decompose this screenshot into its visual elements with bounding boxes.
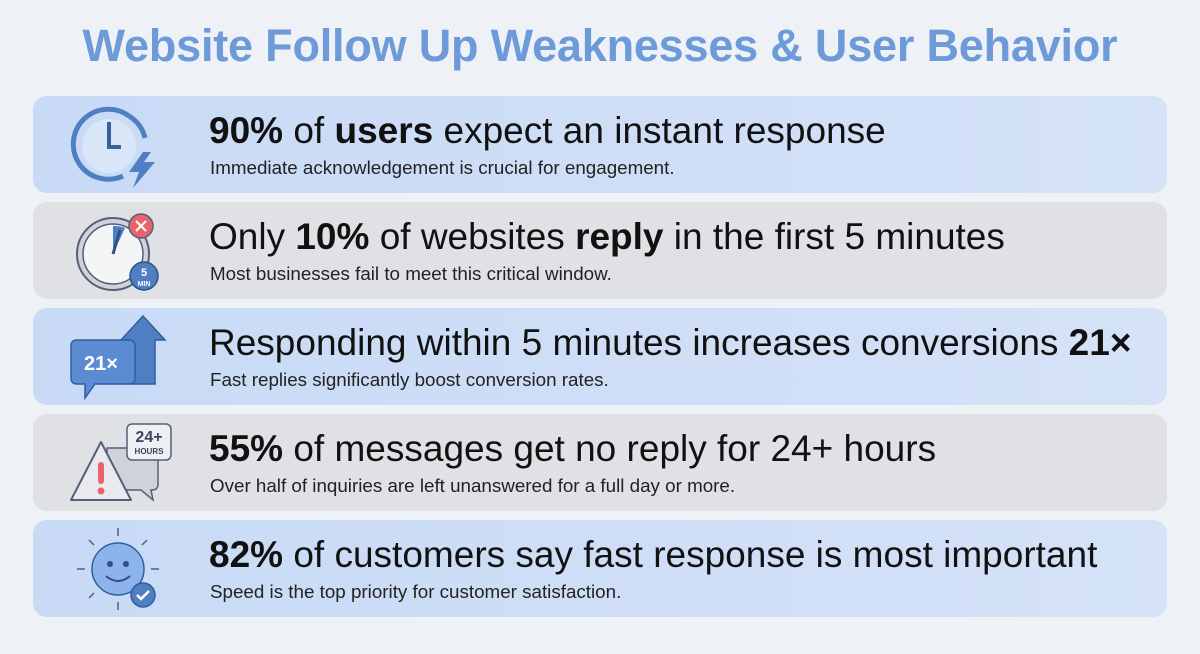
icon: warning triangle with 24+ hours bubble: [70, 423, 172, 502]
heading: 55% of messages get no reply for 24+ hours: [209, 428, 936, 469]
panel: only 10% reply: [33, 202, 1167, 299]
icon: 21x chat with up arrow: [70, 315, 167, 400]
icon: clock with x and 5 min: MIN: [138, 281, 150, 288]
icon: smiley sun with check: [77, 528, 159, 610]
title: Website Follow Up Weaknesses & User Behavior: [83, 20, 1117, 71]
icon: 21x chat with up arrow: 21×: [84, 353, 118, 375]
icon: warning triangle with 24+ hours bubble: HOURS: [135, 447, 164, 456]
icon: clock with lightning: [70, 106, 155, 188]
icon: warning triangle with 24+ hours bubble: 24+: [135, 429, 163, 446]
heading: Responding within 5 minutes increases conversions 21×: [209, 322, 1131, 363]
heading: 82% of customers say fast response is most important: [209, 534, 1097, 575]
heading: Only 10% of websites reply in the first 5 minutes: [209, 216, 1005, 257]
subtext: Most businesses fail to meet this critical window.: [210, 263, 612, 284]
icon: clock with x and 5 min: [76, 213, 159, 291]
panel: 21x conversions: [33, 308, 1167, 405]
panel: instant response: [33, 96, 1167, 193]
icon: clock with x and 5 min: 5: [141, 267, 147, 279]
subtext: Speed is the top priority for customer satisfaction.: [210, 581, 621, 602]
panel: 82% customers: [33, 520, 1167, 617]
subtext: Over half of inquiries are left unanswered for a full day or more.: [210, 475, 735, 496]
subtext: Fast replies significantly boost conversion rates.: [210, 369, 609, 390]
panel: 55% no reply: [33, 414, 1167, 511]
subtext: Immediate acknowledgement is crucial for engagement.: [210, 157, 675, 178]
heading: 90% of users expect an instant response: [209, 110, 886, 151]
